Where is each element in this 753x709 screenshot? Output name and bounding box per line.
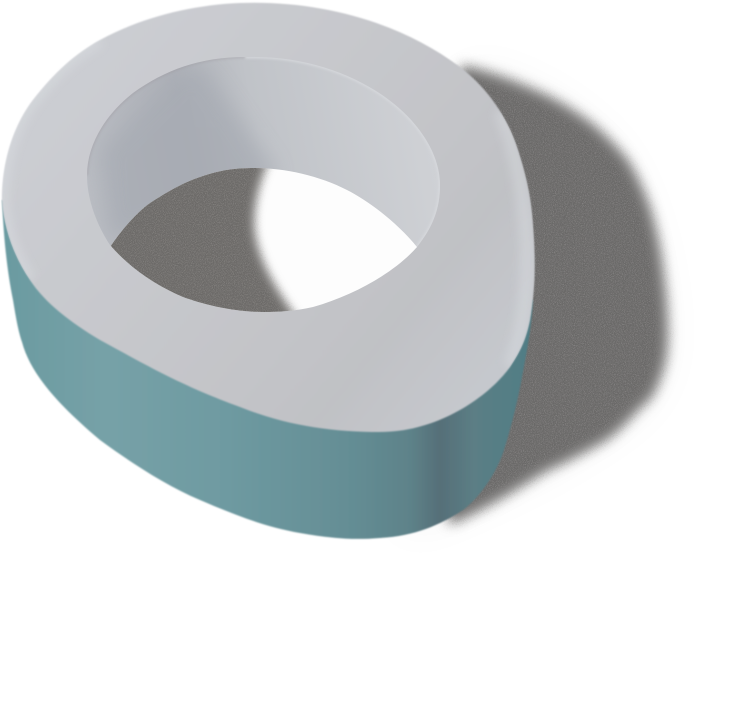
cast shadow on ground [400,66,667,535]
hole inner wall [87,57,440,246]
illustration: 3D rounded ring with cast shadow [1,2,679,540]
floor seen through the hole, lit and shaded [110,168,417,312]
ring top face [2,3,535,432]
ring outer side wall [2,200,533,539]
floor shadow patch [110,168,299,312]
